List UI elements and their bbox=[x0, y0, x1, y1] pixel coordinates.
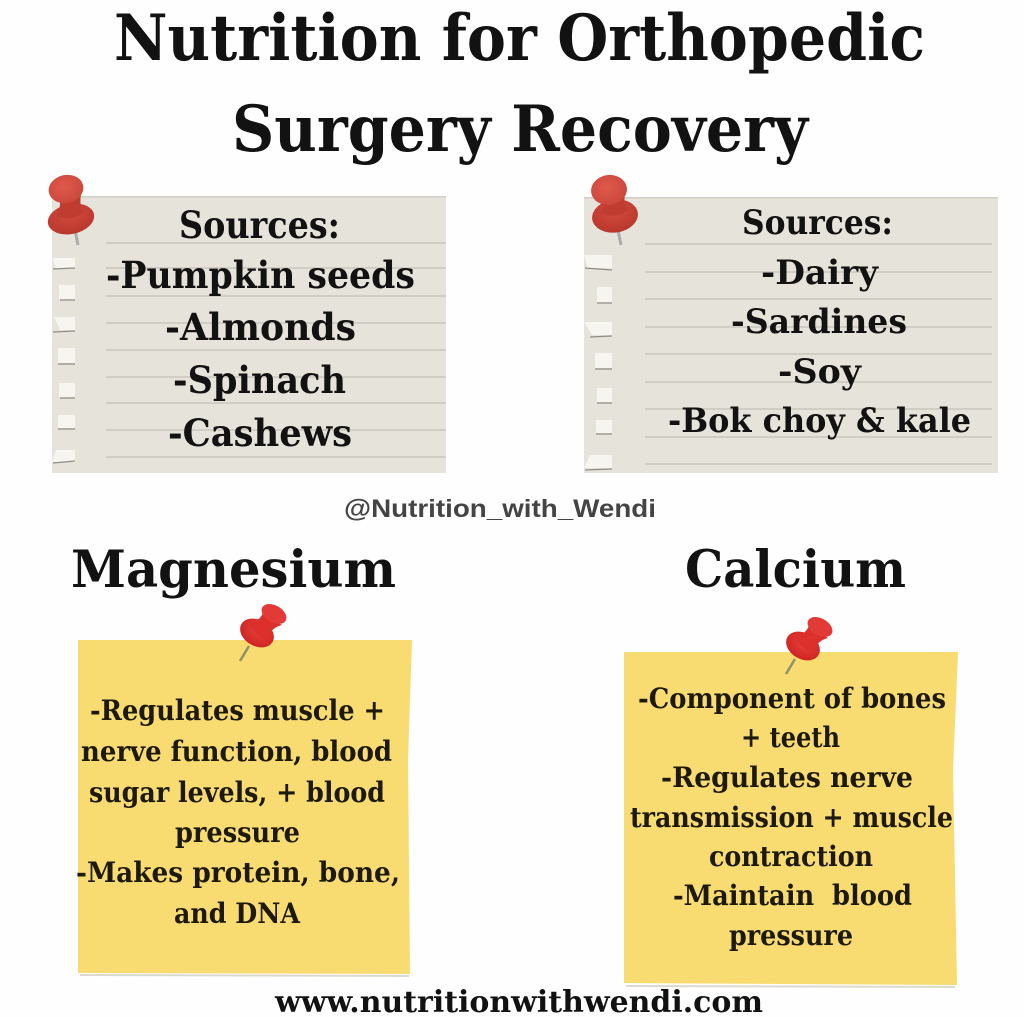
sources list: -Sardines bbox=[731, 302, 907, 342]
sources list: -Spinach bbox=[173, 358, 346, 402]
benefits text: contraction bbox=[709, 840, 873, 873]
title: Nutrition for Orthopedic bbox=[114, 1, 925, 76]
paper sheet bbox=[52, 196, 446, 473]
note shadow bbox=[80, 975, 409, 976]
sources list bbox=[668, 203, 971, 441]
heading: magnesium: Magnesium bbox=[71, 540, 396, 600]
sources list: -Almonds bbox=[165, 305, 356, 349]
benefits text: transmission + muscle bbox=[630, 801, 953, 834]
watermark handle: @Nutrition_with_Wendi bbox=[344, 495, 656, 523]
benefits text: + teeth bbox=[741, 721, 840, 754]
icon: red push pin bbox=[781, 613, 836, 674]
benefits text: nerve function, blood bbox=[81, 735, 392, 768]
benefits text bbox=[630, 682, 953, 952]
note shadow bbox=[626, 986, 955, 987]
benefits text: pressure bbox=[729, 919, 853, 952]
benefits text: sugar levels, + blood bbox=[89, 776, 385, 809]
benefits text bbox=[76, 694, 400, 930]
panel: magnesium sources note bbox=[45, 172, 446, 473]
panel: magnesium sticky note bbox=[76, 600, 412, 976]
benefits text: and DNA bbox=[174, 897, 301, 930]
icon: red push pin bbox=[45, 172, 97, 245]
torn binder strip bbox=[584, 255, 612, 468]
sources list: -Bok choy & kale bbox=[668, 401, 971, 441]
benefits text: -Makes protein, bone, bbox=[76, 856, 400, 889]
benefits text: -Regulates muscle + bbox=[90, 694, 385, 727]
sources list: Sources: bbox=[742, 203, 893, 243]
icon: red push pin bbox=[589, 173, 640, 245]
yellow sticky paper bbox=[78, 640, 412, 974]
sources list: -Pumpkin seeds bbox=[106, 253, 415, 297]
benefits text: pressure bbox=[175, 816, 300, 849]
torn binder strip bbox=[52, 258, 75, 462]
benefits text: -Component of bones bbox=[638, 682, 946, 715]
title: Surgery Recovery bbox=[232, 92, 810, 167]
panel: calcium sources note bbox=[584, 173, 998, 473]
sources list: -Soy bbox=[778, 352, 862, 392]
paper sheet bbox=[584, 197, 998, 473]
benefits text: -Maintain blood bbox=[673, 879, 912, 912]
sources list: -Cashews bbox=[168, 411, 352, 455]
title bbox=[114, 1, 925, 167]
yellow sticky paper bbox=[624, 652, 958, 985]
icon: red push pin bbox=[235, 600, 290, 661]
sources list: -Dairy bbox=[761, 253, 879, 293]
sources list: Sources: bbox=[179, 203, 340, 247]
sources list bbox=[106, 203, 415, 455]
heading: calcium: Calcium bbox=[685, 540, 906, 600]
benefits text: -Regulates nerve bbox=[661, 761, 913, 794]
panel: calcium sticky note bbox=[624, 613, 958, 987]
